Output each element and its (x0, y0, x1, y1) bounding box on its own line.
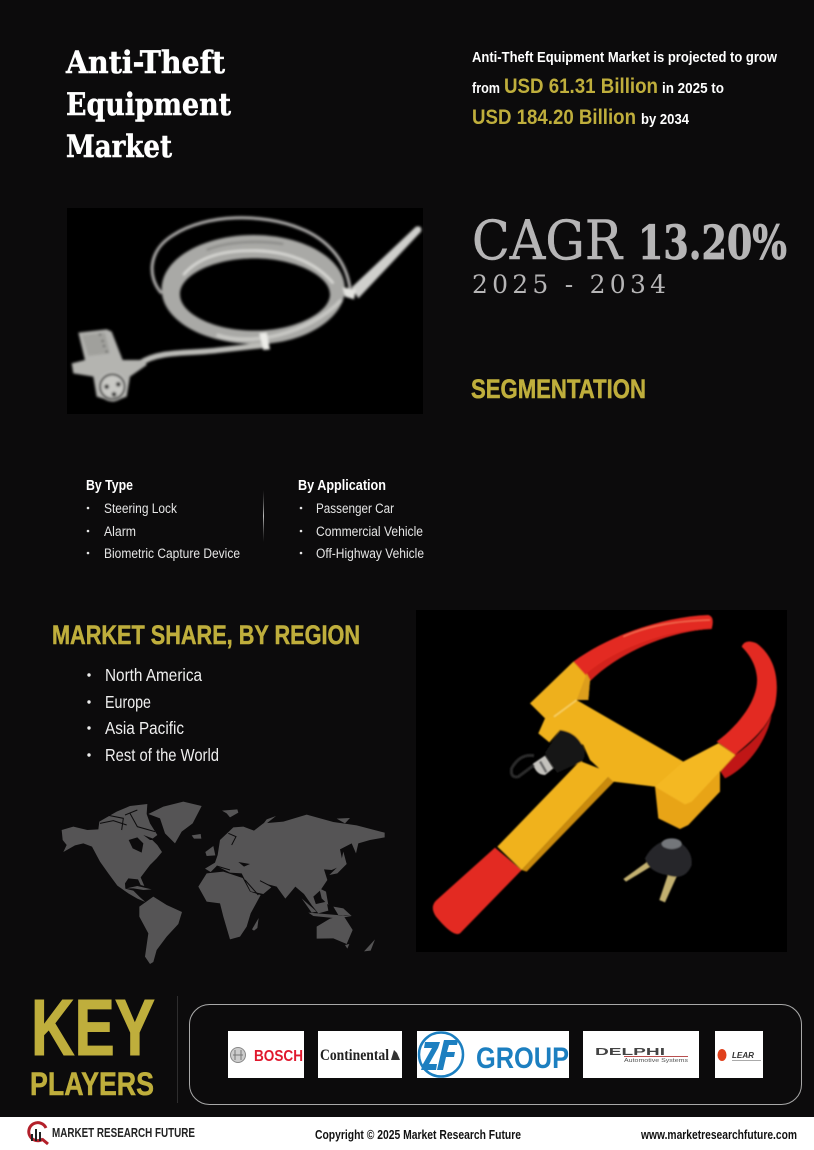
region list: Rest of the World (105, 745, 219, 765)
region list: Asia Pacific (105, 718, 184, 738)
logo: ZF Group: GROUP (476, 1042, 569, 1075)
lower bracket side (613, 743, 735, 829)
yellow cross bar (538, 700, 683, 787)
segment list: by type: Alarm (104, 524, 136, 539)
logo: Market Research Future: MARKET RESEARCH FUTURE (52, 1126, 195, 1140)
left yellow bracket (530, 662, 590, 718)
logo: Continental: Continental (320, 1047, 389, 1064)
segment list: by application: By Application (298, 478, 386, 494)
segment list: by type (86, 478, 240, 561)
combination lock body (72, 329, 147, 402)
sleeve and tail (352, 226, 421, 298)
segment list: by type: Biometric Capture Device (104, 546, 240, 561)
image: wheel clamp (416, 610, 787, 952)
logo: Lear: LEAR (732, 1051, 754, 1060)
keys (623, 861, 651, 882)
logo: Market Research Future (29, 1123, 195, 1144)
logo: ZF Group (417, 1031, 569, 1078)
segment list: by application: Off-Highway Vehicle (316, 546, 424, 561)
logo: Continental (318, 1031, 402, 1078)
title (65, 45, 232, 165)
copyright: Copyright © 2025 Market Research Future (315, 1128, 521, 1142)
market growth summary: in 2025 to (662, 81, 724, 97)
red grip (433, 848, 522, 934)
key players panel (190, 1004, 802, 1104)
logo: Bosch: BOSCH (254, 1048, 303, 1065)
image: cable lock (67, 208, 423, 414)
segmentation heading: SEGMENTATION (471, 374, 646, 404)
segment list: by application: Commercial Vehicle (316, 524, 423, 539)
CAGR figure: CAGR (472, 209, 623, 272)
title: Anti-Theft (65, 45, 226, 81)
segment list: by type: By Type (86, 478, 133, 494)
region list (87, 665, 219, 765)
footer (0, 1117, 814, 1150)
title: Market (66, 129, 173, 165)
upper red arm (573, 615, 713, 681)
key players heading: KEY (31, 983, 155, 1072)
right red arm (717, 641, 777, 755)
handle (497, 761, 612, 870)
coiled cable (162, 235, 345, 344)
segment list: by type: Steering Lock (104, 501, 177, 516)
logo: Delphi: Automotive Systems (624, 1058, 689, 1064)
key players heading: PLAYERS (30, 1066, 154, 1102)
segment list: by application (298, 478, 424, 561)
lock cylinder (545, 730, 585, 773)
logo: Delphi: DELPHI (595, 1047, 665, 1058)
region list: Europe (105, 692, 151, 712)
market growth summary: USD 61.31 Billion (504, 75, 658, 98)
right yellow bracket (655, 743, 735, 804)
lead wire (140, 345, 265, 363)
market growth summary: from (472, 81, 500, 97)
market growth summary: USD 184.20 Billion (472, 106, 636, 129)
title: Equipment (66, 87, 232, 123)
CAGR figure: 2025 - 2034 (472, 270, 666, 299)
region list: North America (105, 665, 202, 685)
market growth summary (472, 50, 778, 129)
segment list: by application: Passenger Car (316, 501, 394, 516)
outer loop of cable (152, 218, 350, 293)
logo: Delphi (583, 1031, 699, 1078)
market growth summary: by 2034 (641, 112, 689, 128)
world map (62, 802, 385, 964)
logo: Lear (715, 1031, 763, 1078)
logo: Bosch (228, 1031, 304, 1078)
market growth summary: Anti-Theft Equipment Market is projected to grow (472, 50, 778, 66)
inland seas and bays (129, 835, 250, 867)
CAGR figure (472, 209, 787, 299)
market share heading: MARKET SHARE, BY REGION (52, 620, 360, 650)
key players heading (30, 983, 155, 1102)
